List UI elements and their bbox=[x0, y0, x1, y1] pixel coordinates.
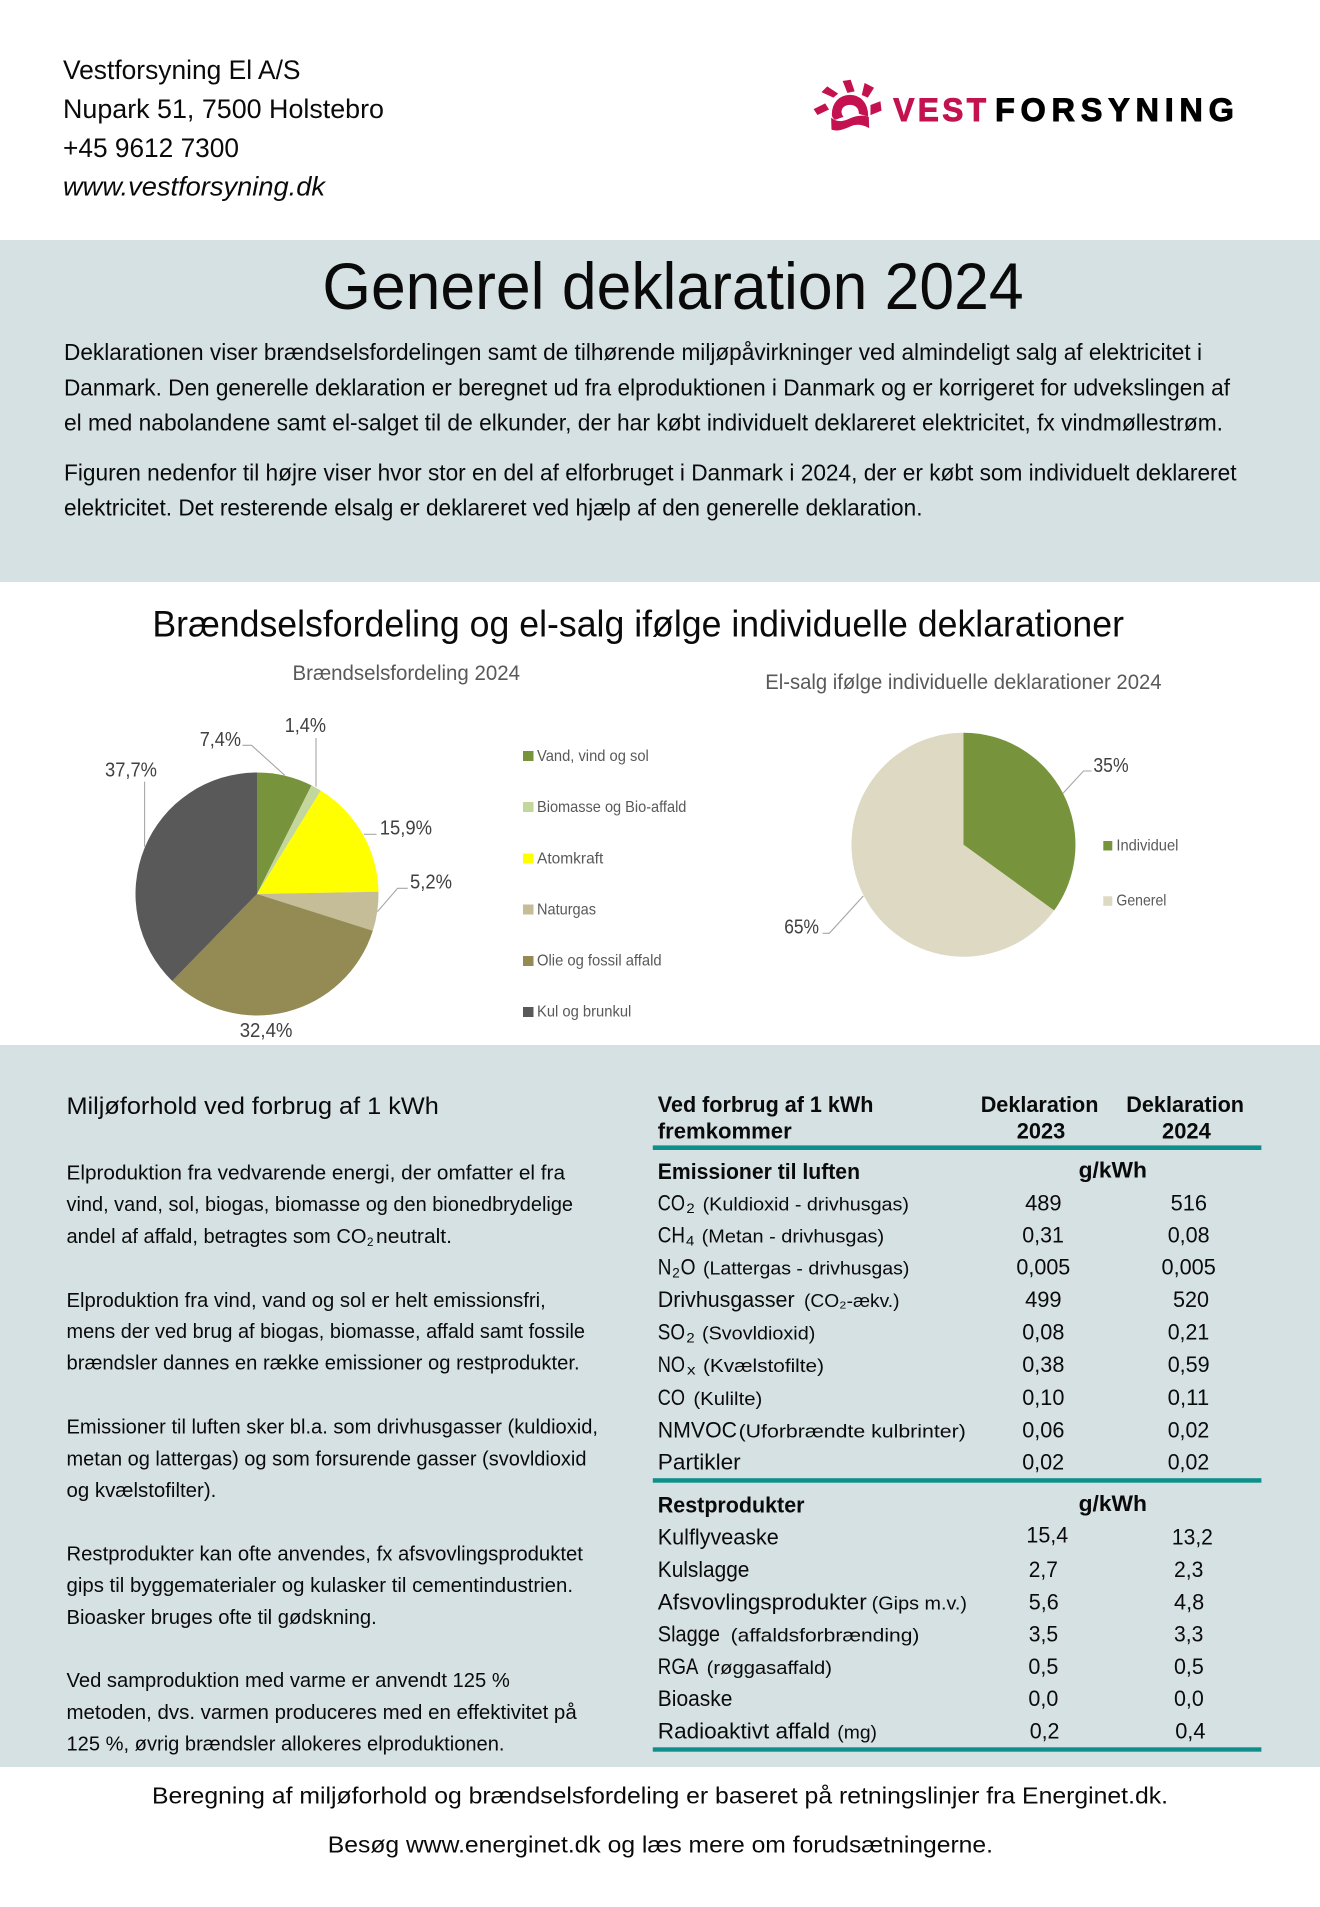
row: RGA: (røggasaffald) bbox=[707, 1658, 832, 1678]
paragraph: vedvarende energi: vind, vand, sol, biogas, biomasse og den bionedbrydelige bbox=[66, 1194, 573, 1216]
sender address block: www.vestforsyning.dk bbox=[63, 172, 327, 202]
row: CH4: 0,08 bbox=[1168, 1223, 1210, 1248]
row: Radioaktivt affald: 0,4 bbox=[1175, 1718, 1206, 1743]
table header bbox=[658, 1092, 1244, 1144]
row: SO2 bbox=[658, 1320, 1209, 1345]
paragraph: restprodukter: gips til byggematerialer og kulasker til cementindustrien. bbox=[66, 1575, 573, 1597]
row: Kulflyveaske: 13,2 bbox=[1172, 1525, 1213, 1550]
legend: Kul og brunkul bbox=[537, 1004, 631, 1021]
row: CH4: 0,31 bbox=[1022, 1223, 1064, 1248]
paragraph: emissionsfri: brændsler dannes en række emissioner og restprodukter. bbox=[66, 1353, 580, 1375]
row: Drivhusgasser: 520 bbox=[1173, 1287, 1209, 1312]
chart title: El-salg ifølge individuelle deklarationer 2024 bbox=[765, 671, 1162, 694]
row: CO: (Kulilte) bbox=[693, 1389, 762, 1409]
paragraph: vedvarende energi: neutralt. bbox=[376, 1226, 452, 1248]
data labels: 5,2% bbox=[410, 872, 452, 894]
row: SO2: (Svovldioxid) bbox=[702, 1324, 815, 1344]
row: Afsvovlingsprodukter: Afsvovlingsprodukter bbox=[658, 1589, 867, 1614]
row: N2O: O bbox=[681, 1255, 696, 1280]
paragraph: vedvarende energi: andel af affald, betragtes som CO bbox=[66, 1226, 366, 1248]
row: CH4 bbox=[658, 1223, 1210, 1248]
row: NOx: x bbox=[687, 1362, 696, 1378]
row: Kulslagge bbox=[658, 1557, 1203, 1582]
row: Bioaske: 0,0 bbox=[1028, 1686, 1058, 1711]
row: Slagge: 3,3 bbox=[1174, 1622, 1203, 1647]
paragraph: samproduktion: Ved samproduktion med varme er anvendt 125 % bbox=[66, 1670, 510, 1692]
table header: Deklaration bbox=[981, 1092, 1098, 1117]
row: Radioaktivt affald: Radioaktivt affald bbox=[658, 1718, 830, 1743]
legend: Biomasse og Bio-affald bbox=[537, 799, 686, 816]
row: NMVOC: 0,06 bbox=[1022, 1417, 1064, 1442]
row: CH4: 4 bbox=[686, 1232, 695, 1248]
row: SO2: 0,21 bbox=[1168, 1320, 1209, 1345]
row: CO2: 489 bbox=[1025, 1190, 1062, 1215]
row: N2O: 0,005 bbox=[1016, 1255, 1070, 1280]
row: NMVOC: (Uforbrændte kulbrinter) bbox=[739, 1421, 966, 1441]
row: NMVOC: NMVOC bbox=[658, 1417, 737, 1442]
row: RGA: 0,5 bbox=[1028, 1654, 1058, 1679]
section heading: Restprodukter: g/kWh bbox=[1079, 1491, 1147, 1516]
section heading: Emissioner til luften: g/kWh bbox=[1079, 1158, 1147, 1183]
row: CO2: (Kuldioxid - drivhusgas) bbox=[703, 1194, 909, 1214]
row: N2O: N bbox=[658, 1255, 672, 1280]
footer note bbox=[152, 1782, 1168, 1858]
row: Partikler: 0,02 bbox=[1168, 1449, 1209, 1474]
data labels: 35% bbox=[1093, 755, 1129, 777]
row: Partikler bbox=[658, 1449, 1209, 1474]
row: NOx bbox=[658, 1352, 1210, 1378]
paragraph: samproduktion: 125 %, øvrig brændsler allokeres elproduktionen. bbox=[66, 1734, 504, 1756]
row: CO bbox=[658, 1385, 1209, 1410]
row: Slagge: (affaldsforbrænding) bbox=[731, 1626, 919, 1646]
data labels: 15,9% bbox=[380, 817, 432, 839]
row: Drivhusgasser: (CO₂-ækv.) bbox=[804, 1291, 900, 1311]
row: CO2: 516 bbox=[1171, 1190, 1207, 1215]
icon: sun and wave bbox=[814, 80, 881, 130]
legend: Atomkraft bbox=[537, 850, 604, 867]
row: SO2: 2 bbox=[686, 1329, 695, 1345]
logo: Vestforsyning: FORSYNING bbox=[995, 92, 1240, 128]
chart title: Brændselsfordeling 2024 bbox=[292, 662, 520, 685]
row: Bioaske: Bioaske bbox=[658, 1686, 732, 1711]
paragraph: restprodukter: Restprodukter kan ofte anvendes, fx afsvovlingsproduktet bbox=[66, 1543, 583, 1565]
paragraph: emissioner til luften: Emissioner til luften sker bl.a. som drivhusgasser (kuldioxid, bbox=[66, 1417, 598, 1439]
paragraph: vedvarende energi: 2 bbox=[367, 1235, 374, 1249]
paragraph: vedvarende energi: Elproduktion fra vedvarende energi, der omfatter el fra bbox=[66, 1162, 566, 1184]
table header: 2024 bbox=[1162, 1119, 1212, 1144]
sender address block: Nupark 51, 7500 Holstebro bbox=[63, 94, 384, 124]
section heading: Emissioner til luften bbox=[658, 1158, 1147, 1184]
title: Generel deklaration 2024 bbox=[322, 249, 1024, 323]
row: SO2: 0,08 bbox=[1022, 1320, 1064, 1345]
row: CH4: CH bbox=[658, 1223, 685, 1248]
row: Kulslagge: Kulslagge bbox=[658, 1557, 749, 1582]
intro text: Deklarationen viser brændselsfordelingen samt de tilhørende miljøpåvirkninger ved almindeligt salg af elektricitet i bbox=[64, 339, 1202, 365]
paragraph: emissioner til luften: og kvælstofilter). bbox=[66, 1480, 216, 1502]
row: Slagge bbox=[658, 1622, 1203, 1647]
row: Kulslagge: 2,3 bbox=[1174, 1557, 1203, 1582]
row: CO: CO bbox=[658, 1385, 685, 1410]
row: Radioaktivt affald: (mg) bbox=[837, 1722, 877, 1742]
row: Drivhusgasser: 499 bbox=[1025, 1287, 1062, 1312]
intro text: elektricitet. Det resterende elsalg er deklareret ved hjælp af den generelle deklaration. bbox=[64, 494, 922, 520]
leader lines bbox=[823, 771, 1092, 933]
data labels bbox=[105, 715, 452, 1042]
row: CO2 bbox=[658, 1190, 1207, 1216]
table header: Ved forbrug af 1 kWh bbox=[658, 1092, 873, 1117]
row: Kulflyveaske bbox=[658, 1522, 1213, 1550]
row: NOx: 0,38 bbox=[1022, 1352, 1064, 1377]
row: CO2: CO bbox=[658, 1190, 685, 1215]
row: Partikler: 0,02 bbox=[1022, 1449, 1064, 1474]
row: Afsvovlingsprodukter: 5,6 bbox=[1029, 1589, 1059, 1614]
row: Partikler: Partikler bbox=[658, 1449, 741, 1474]
section heading: Restprodukter: Restprodukter bbox=[658, 1492, 805, 1517]
row: NOx: NO bbox=[658, 1352, 685, 1377]
row: NMVOC: 0,02 bbox=[1168, 1417, 1209, 1442]
row: N2O bbox=[658, 1255, 1216, 1280]
sender address block: Vestforsyning El A/S bbox=[63, 55, 300, 85]
section heading: Emissioner til luften: Emissioner til luften bbox=[658, 1159, 860, 1184]
row: Kulslagge: 2,7 bbox=[1029, 1557, 1058, 1582]
heading: fuel mix and sales: Brændselsfordeling og el-salg ifølge individuelle deklarationer bbox=[152, 604, 1124, 645]
chart: Brændselsfordeling 2024 pie bbox=[105, 662, 686, 1042]
row: Kulflyveaske: 15,4 bbox=[1026, 1522, 1068, 1547]
section heading: Restprodukter bbox=[658, 1491, 1147, 1517]
logo: Vestforsyning bbox=[814, 80, 1240, 130]
row: CO2: 2 bbox=[686, 1200, 695, 1216]
row: Drivhusgasser bbox=[658, 1287, 1209, 1312]
row: Radioaktivt affald bbox=[658, 1718, 1206, 1743]
row: RGA: 0,5 bbox=[1174, 1654, 1204, 1679]
row: CO: 0,11 bbox=[1168, 1385, 1209, 1410]
footer note: Besøg www.energinet.dk og læs mere om forudsætningerne. bbox=[328, 1832, 993, 1858]
pie slices bbox=[136, 772, 379, 1015]
legend: Vand, vind og sol bbox=[537, 748, 649, 765]
row: N2O: 2 bbox=[672, 1264, 680, 1280]
data labels: 37,7% bbox=[105, 760, 157, 782]
row: SO2: SO bbox=[658, 1320, 685, 1345]
legend: Olie og fossil affald bbox=[537, 953, 662, 970]
paragraph: samproduktion: metoden, dvs. varmen produceres med en effektivitet på bbox=[66, 1702, 578, 1724]
panel: environment band bbox=[0, 1045, 1320, 1767]
row: Afsvovlingsprodukter: (Gips m.v.) bbox=[872, 1593, 967, 1613]
sender address block bbox=[63, 55, 384, 202]
text column: Miljøforhold bbox=[66, 1093, 598, 1756]
legend: Individuel bbox=[1116, 838, 1178, 855]
row: CO: 0,10 bbox=[1022, 1385, 1064, 1410]
sender address block: +45 9612 7300 bbox=[63, 133, 239, 163]
row: N2O: 0,005 bbox=[1162, 1255, 1216, 1280]
table header: Deklaration bbox=[1126, 1092, 1244, 1117]
chart: El-salg pie bbox=[765, 671, 1178, 957]
intro text: Figuren nedenfor til højre viser hvor stor en del af elforbruget i Danmark i 2024, der er købt som individuelt deklareret bbox=[64, 459, 1237, 485]
row: Afsvovlingsprodukter bbox=[658, 1589, 1204, 1614]
row: CH4: (Metan - drivhusgas) bbox=[702, 1227, 884, 1247]
row: RGA bbox=[658, 1654, 1204, 1679]
paragraph: emissionsfri: mens der ved brug af biogas, biomasse, affald samt fossile bbox=[66, 1321, 585, 1343]
row: N2O: (Lattergas - drivhusgas) bbox=[703, 1259, 909, 1279]
paragraph: restprodukter bbox=[66, 1543, 583, 1629]
paragraph: vedvarende energi bbox=[66, 1162, 573, 1249]
row: Afsvovlingsprodukter: 4,8 bbox=[1174, 1589, 1204, 1614]
paragraph: emissioner til luften bbox=[66, 1417, 598, 1502]
panel: introduction band bbox=[0, 240, 1320, 582]
paragraph: emissioner til luften: metan og lattergas) og som forsurende gasser (svovldioxid bbox=[66, 1448, 586, 1470]
column heading: Miljøforhold ved forbrug af 1 kWh bbox=[66, 1093, 439, 1120]
table: emissions and residual products bbox=[653, 1092, 1261, 1752]
row: Kulflyveaske: Kulflyveaske bbox=[658, 1525, 779, 1550]
data labels: 32,4% bbox=[240, 1020, 293, 1042]
table header: 2023 bbox=[1017, 1119, 1065, 1144]
data labels: 1,4% bbox=[285, 715, 326, 737]
data labels: 65% bbox=[784, 916, 819, 938]
legend: Naturgas bbox=[537, 902, 596, 919]
paragraph: samproduktion bbox=[66, 1670, 578, 1756]
paragraph: emissionsfri: Elproduktion fra vind, vand og sol er helt emissionsfri, bbox=[66, 1290, 546, 1312]
row: Slagge: Slagge bbox=[658, 1622, 720, 1647]
logo: Vestforsyning: VEST bbox=[893, 92, 989, 128]
row: Drivhusgasser: Drivhusgasser bbox=[658, 1287, 795, 1312]
row: Slagge: 3,5 bbox=[1029, 1622, 1058, 1647]
row: NMVOC bbox=[658, 1417, 1209, 1442]
paragraph: restprodukter: Bioasker bruges ofte til gødskning. bbox=[66, 1607, 377, 1629]
legend bbox=[523, 748, 686, 1021]
footer note: Beregning af miljøforhold og brændselsfordeling er baseret på retningslinjer fra Energinet.dk. bbox=[152, 1782, 1168, 1808]
data labels bbox=[784, 755, 1129, 938]
table header: fremkommer bbox=[658, 1119, 792, 1144]
legend: Generel bbox=[1116, 893, 1166, 910]
row: Radioaktivt affald: 0,2 bbox=[1030, 1718, 1060, 1743]
row: NOx: (Kvælstofilte) bbox=[703, 1356, 824, 1376]
legend bbox=[1103, 838, 1178, 910]
row: NOx: 0,59 bbox=[1168, 1352, 1210, 1377]
intro text: el med nabolandene samt el-salget til de elkunder, der har købt individuelt deklareret elektricitet, fx vindmøllestrøm. bbox=[64, 410, 1223, 436]
row: Bioaske bbox=[658, 1686, 1204, 1711]
row: RGA: RGA bbox=[658, 1654, 699, 1679]
paragraph: emissionsfri bbox=[66, 1290, 585, 1375]
row: Bioaske: 0,0 bbox=[1174, 1686, 1204, 1711]
intro text bbox=[64, 339, 1237, 520]
intro text: Danmark. Den generelle deklaration er beregnet ud fra elproduktionen i Danmark og er korrigeret for udvekslingen af bbox=[64, 374, 1231, 400]
leader lines bbox=[145, 738, 408, 912]
data labels: 7,4% bbox=[200, 729, 241, 751]
pie slices bbox=[851, 733, 1075, 957]
